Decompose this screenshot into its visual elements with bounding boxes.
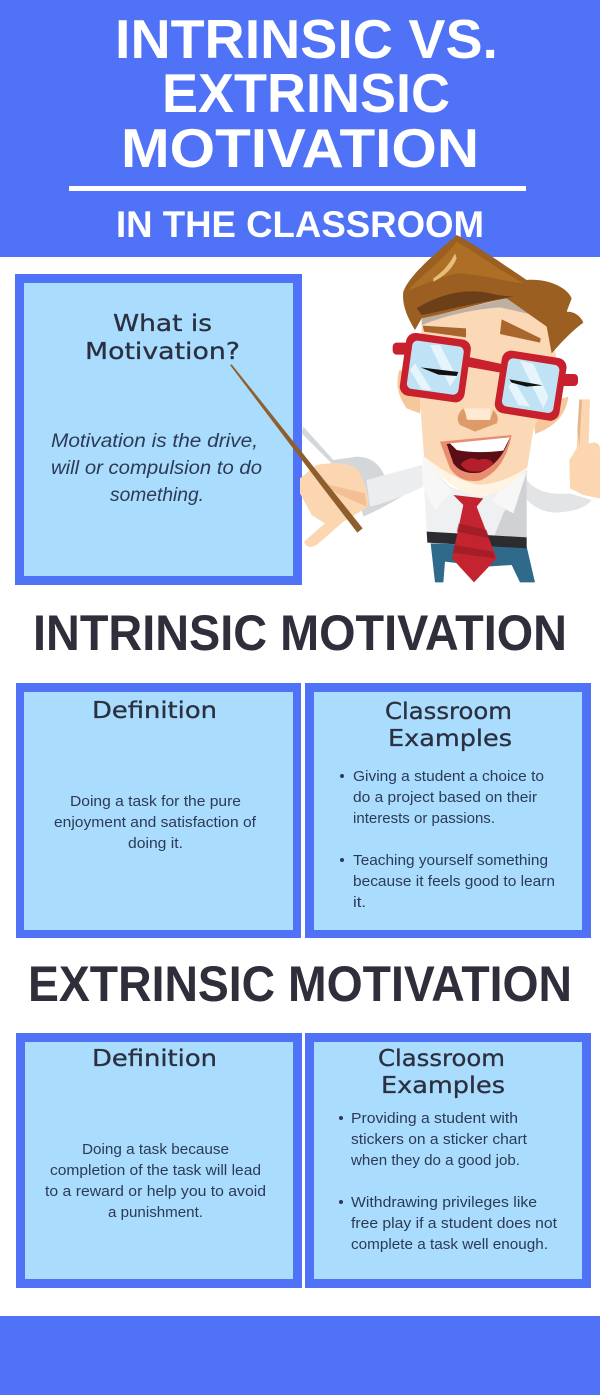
definition text: a punishment. <box>108 1204 203 1221</box>
panel heading <box>85 311 240 365</box>
footer band <box>0 1316 600 1395</box>
definition text: doing it. <box>128 835 183 852</box>
title <box>115 8 498 179</box>
title: EXTRINSIC <box>162 62 450 124</box>
face <box>420 298 558 497</box>
examples list <box>340 768 555 911</box>
definition text <box>45 1141 266 1221</box>
pointer stick <box>230 364 363 533</box>
pointing hand <box>569 399 600 498</box>
eyebrows <box>423 326 466 337</box>
definition text: to a reward or help you to avoid <box>45 1183 266 1200</box>
subtitle: IN THE CLASSROOM <box>116 204 484 245</box>
panel text <box>51 431 262 506</box>
tie <box>452 495 497 582</box>
header band <box>0 0 600 257</box>
definition text: completion of the task will lead <box>50 1162 261 1179</box>
examples list: Teaching yourself something <box>353 852 548 869</box>
examples heading: Examples <box>381 1073 505 1099</box>
examples list <box>339 1110 558 1253</box>
definition text: Doing a task for the pure <box>70 793 241 810</box>
definition text: enjoyment and satisfaction of <box>54 814 257 831</box>
panel: extrinsic definition <box>16 1033 302 1288</box>
panel: intrinsic definition <box>16 683 301 938</box>
ears <box>397 370 422 413</box>
examples list: do a project based on their <box>353 789 537 806</box>
trousers <box>431 543 535 582</box>
examples heading <box>385 699 512 752</box>
panel: extrinsic classroom examples <box>305 1033 591 1288</box>
panel heading: What is <box>113 311 212 337</box>
examples list: it. <box>353 894 366 911</box>
examples list: Giving a student a choice to <box>353 768 544 785</box>
nose <box>458 408 498 432</box>
examples list: stickers on a sticker chart <box>351 1131 528 1148</box>
examples list: complete a task well enough. <box>351 1236 548 1253</box>
examples heading: Classroom <box>385 699 512 725</box>
illustration: teacher with glasses and pointer <box>230 235 600 582</box>
panel text: will or compulsion to do <box>51 458 262 479</box>
eyes <box>421 367 458 376</box>
pointer hand <box>300 463 368 547</box>
title: INTRINSIC VS. <box>115 8 498 70</box>
panel text: Motivation is the drive, <box>51 431 258 452</box>
examples list: interests or passions. <box>353 810 495 827</box>
examples heading: Classroom <box>378 1046 505 1072</box>
glasses <box>393 343 413 355</box>
panel: what is motivation <box>15 274 302 585</box>
examples list: Withdrawing privileges like <box>351 1194 537 1211</box>
examples list: because it feels good to learn <box>353 873 555 890</box>
panel: intrinsic classroom examples <box>305 683 591 938</box>
panel heading: Motivation? <box>85 339 240 365</box>
examples list: when they do a good job. <box>350 1152 520 1169</box>
definition text: Doing a task because <box>82 1141 229 1158</box>
examples list: Providing a student with <box>351 1110 518 1127</box>
arms <box>302 427 422 517</box>
definition heading: Definition <box>92 698 217 724</box>
definition text <box>54 793 257 852</box>
panel text: something. <box>110 485 204 506</box>
heading: extrinsic motivation: EXTRINSIC MOTIVATION <box>28 956 572 1012</box>
mouth <box>440 435 512 481</box>
examples heading <box>378 1046 505 1099</box>
shirt <box>423 457 527 538</box>
hair <box>403 235 583 353</box>
examples heading: Examples <box>388 726 512 752</box>
heading: intrinsic motivation: INTRINSIC MOTIVATION <box>33 605 567 661</box>
definition heading: Definition <box>92 1046 217 1072</box>
title: MOTIVATION <box>121 117 479 179</box>
examples list: free play if a student does not <box>351 1215 558 1232</box>
